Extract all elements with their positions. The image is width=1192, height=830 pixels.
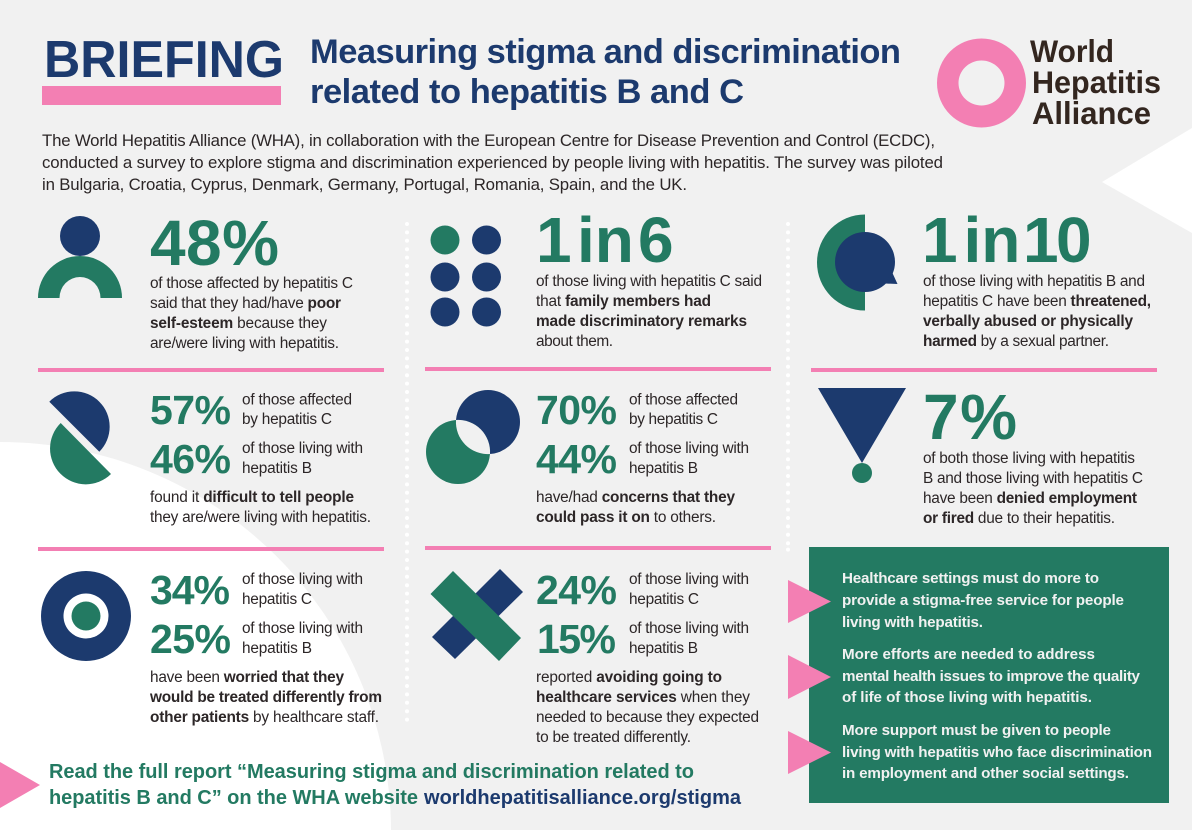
text: avoiding healthcare: healthcare services when they [536,689,750,706]
label: 34%: hepatitis C [242,591,312,608]
text: employment description: have been denied employment [923,490,1137,507]
text: difficult to tell [150,489,371,526]
icon: speech bubble [817,214,898,310]
label: 15% [629,620,749,657]
stat: 25%: 25% [150,616,231,662]
text: partner description: verbally abused or physically [923,313,1133,330]
arrow: recommendation 2 [788,655,831,699]
intro text: The World Hepatitis Alliance (WHA), in collaboration with the European Centre for Disease Prevention and Control (ECDC), [42,131,935,150]
logo: World Hepatitis Alliance: World [1030,33,1114,69]
stat: 1 in 10: in [964,204,1020,276]
text: recommendation 1: Healthcare settings must do more to [842,570,1099,587]
footer call to action [49,761,742,809]
text: employment description: B and those living with hepatitis C [923,470,1143,487]
text: avoiding healthcare: to be treated differently. [536,729,691,746]
panel: 48% poor self-esteem [38,207,353,352]
stat: 15%: 15% [537,616,616,662]
header: briefing label: BRIEFING [44,31,284,89]
stat: 1 in 6: 6 [638,204,674,276]
label: 44% [629,440,749,477]
text: recommendation 2: mental health issues to improve the quality [842,668,1141,685]
text: avoiding healthcare [536,669,759,746]
text: recommendation 3: in employment and other social settings. [842,765,1129,782]
stat: 48%: 48% [150,207,279,279]
label: 46%: of those living with [242,440,363,457]
text: recommendation 3: living with hepatitis who face discrimination [842,744,1152,761]
label: 34%: of those living with [242,571,363,588]
intro text: in Bulgaria, Croatia, Cyprus, Denmark, Germany, Portugal, Romania, Spain, and the UK. [42,175,687,194]
logo: World Hepatitis Alliance: Hepatitis [1032,64,1161,100]
label: 24%: of those living with [629,571,749,588]
footer call to action: hepatitis B and C” on the WHA website [49,787,418,809]
label: 25%: of those living with [242,620,363,637]
panel: 1 in 6 family remarks [430,204,762,350]
arrow: recommendation 1 [788,580,831,623]
stat: 1 in 10: 1 [922,204,958,276]
stat: 1 in 10: 1 [1023,204,1059,276]
text: recommendation 1 [842,570,1124,631]
icon: overlapping circles [426,390,520,484]
text: treated differently: other patients by healthcare staff. [150,709,379,726]
label: 57% [242,392,352,428]
text: self-esteem description: of those affected by hepatitis C [150,275,353,292]
panel: 70% and 44% pass it on [426,387,749,526]
text: self-esteem description: self-esteem because they [150,315,327,332]
text: partner description [923,273,1151,350]
stat: 7%: 7% [923,381,1017,453]
text: recommendation 3 [842,722,1152,782]
text: recommendation 3: More support must be given to people [842,722,1111,739]
text: family remarks description [536,273,762,350]
text: employment description: of both those living with hepatitis [923,450,1135,467]
text: treated differently [149,669,382,726]
icon: target [41,571,131,661]
stat: 24%: 24% [536,567,617,613]
text: recommendation 2: of life of those living with hepatitis. [842,689,1092,706]
icon: cross [430,569,523,661]
panel: 7% denied employment [818,381,1143,527]
text: partner description: hepatitis C have been threatened, [923,293,1151,310]
text: recommendation 1: provide a stigma-free service for people [842,592,1124,609]
label: 46% [242,440,363,477]
label: 70% [629,392,738,428]
icon: split circle [49,391,111,484]
text: avoiding healthcare: needed to because they expected [536,709,759,726]
text: treated differently: have been worried that they [150,669,344,686]
footer call to action: worldhepatitisalliance.org/stigma [423,787,742,809]
label: 24% [629,571,749,608]
footer call to action: Read the full report “Measuring stigma and discrimination related to [49,761,694,783]
text: recommendation 2: More efforts are needed to address [842,646,1095,663]
stat: 34%: 34% [150,567,230,613]
intro text: conducted a survey to explore stigma and discrimination experienced by people living with hepatitis. The survey was piloted [42,153,943,172]
text: family remarks description: made discriminatory remarks [536,313,747,330]
stat: 44%: 44% [536,436,617,482]
logo: World Hepatitis Alliance: Alliance [1032,95,1151,131]
text: treated differently: would be treated differently from [149,689,382,706]
label: 57%: of those affected [242,392,352,408]
label: 25% [242,620,363,657]
arrow: footer [0,762,40,808]
icon: six dots [430,226,501,326]
label: 57%: by hepatitis C [242,411,332,428]
text: partner description: of those living with hepatitis B and [923,273,1145,290]
text: partner description: harmed by a sexual partner. [923,333,1109,350]
text: family remarks description: that family members had [536,293,711,310]
text: family remarks description: about them. [536,333,613,350]
icon: person [38,216,122,298]
box background [809,547,1169,803]
text: family remarks description: of those living with hepatitis C said [536,273,762,290]
arrow: recommendation 3 [788,731,831,774]
label: 34% [242,571,363,608]
panel: 1 in 10 sexual partner [817,204,1151,350]
title [310,33,901,111]
icon: exclamation triangle [818,388,906,483]
title: Measuring stigma and discrimination [310,33,901,71]
panel: recommendations [788,547,1169,803]
text: pass it on: could pass it on to others. [536,509,716,526]
label: 25%: hepatitis B [242,640,312,657]
text: pass it on: have/had concerns that they [536,489,735,506]
stat: 1 in 10: 0 [1056,204,1092,276]
text: recommendation 2 [842,646,1141,706]
label: 15%: hepatitis B [629,640,698,657]
text: difficult to tell: they are/were living with hepatitis. [150,509,371,526]
label: 24%: hepatitis C [629,591,699,608]
text: self-esteem description: said that they had/have poor [150,295,341,312]
text: avoiding healthcare: reported avoiding going to [536,669,722,686]
label: 70%: of those affected [629,392,738,408]
label: 46%: hepatitis B [242,460,312,477]
stat: 46%: 46% [150,436,231,482]
panel: 24% and 15% avoiding healthcare [430,567,759,746]
stat: 57%: 57% [150,387,231,433]
stat: 70%: 70% [536,387,617,433]
label: 15%: of those living with [629,620,749,637]
text: pass it on [536,489,735,526]
intro text [42,131,943,194]
title: related to hepatitis B and C [310,73,744,111]
label: 70%: by hepatitis C [629,411,718,428]
stat: 1 in 6: 1 [536,204,572,276]
stat: 1 in 6: in [577,204,634,276]
text: recommendation 1: living with hepatitis. [842,614,983,631]
text: employment description [923,450,1143,527]
logo: World Hepatitis Alliance [937,33,1161,131]
panel: 57% and 46% difficult to tell [49,387,371,526]
text: employment description: or fired due to their hepatitis. [923,510,1115,527]
text: difficult to tell: found it difficult to tell people [150,489,354,506]
panel: 34% and 25% treated differently [41,567,382,726]
label: 44%: of those living with [629,440,749,457]
text: self-esteem description [150,275,353,352]
text: self-esteem description: are/were living with hepatitis. [150,335,339,352]
label: 44%: hepatitis B [629,460,698,477]
